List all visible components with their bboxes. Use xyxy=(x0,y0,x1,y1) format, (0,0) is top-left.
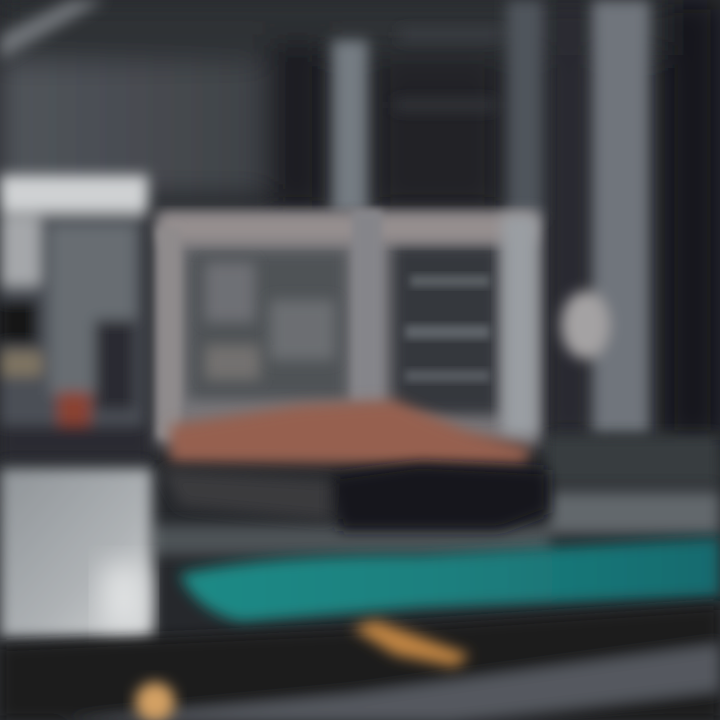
pillars: vertical columns xyxy=(332,0,650,435)
foreground dark band xyxy=(0,605,720,720)
orange accent: bottom xyxy=(135,682,175,720)
decorative pipe: top left diagonal xyxy=(0,0,105,60)
glass box: frame and panes xyxy=(155,210,540,447)
black base xyxy=(162,464,548,530)
teal surface xyxy=(180,538,720,622)
left bright metal block xyxy=(0,468,152,638)
machine: left white unit xyxy=(0,175,150,460)
copper material xyxy=(170,400,530,465)
floor: back surface xyxy=(150,435,720,555)
orange accent: center xyxy=(352,620,470,667)
background: factory wall and pipes xyxy=(0,0,720,440)
